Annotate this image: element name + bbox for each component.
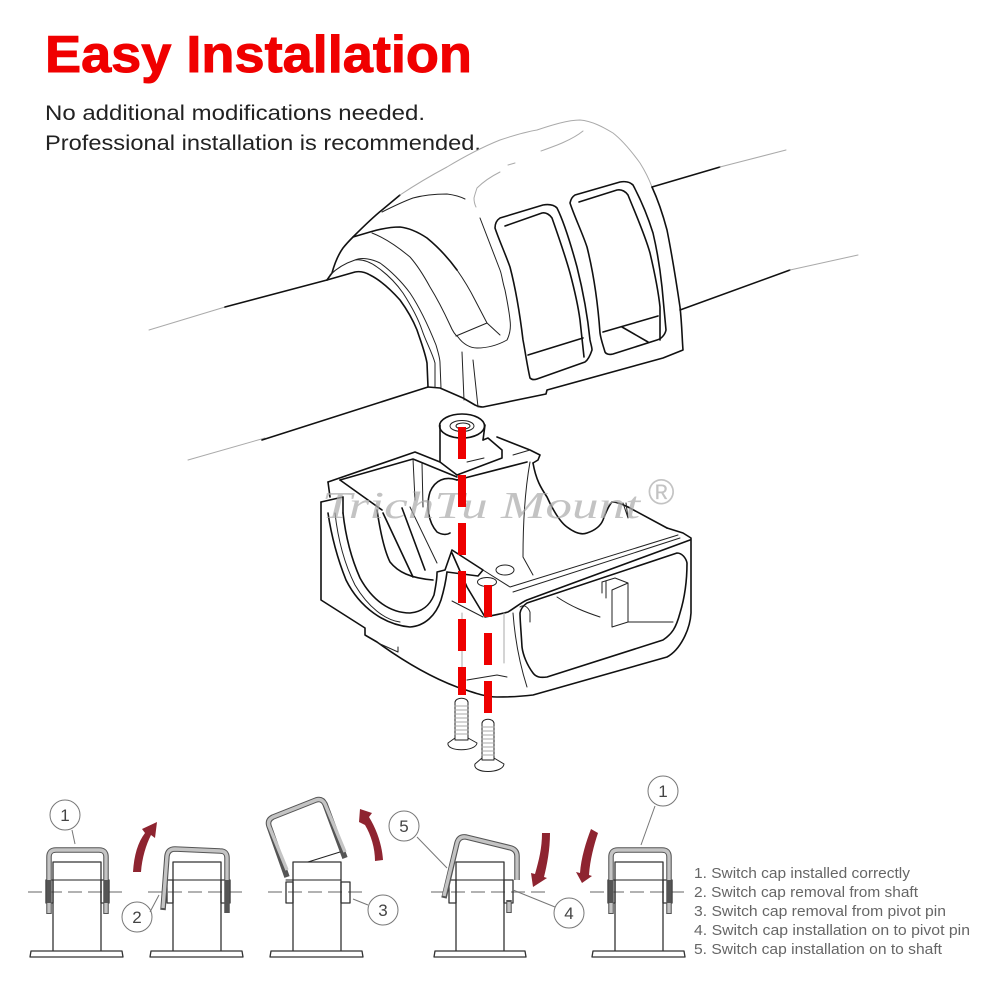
legend: 3. Switch cap removal from pivot pin xyxy=(694,903,946,920)
screws xyxy=(448,698,504,772)
arrow down 1 xyxy=(531,833,550,887)
housing switch window xyxy=(513,553,687,687)
step diagram 2: 2 xyxy=(132,908,142,927)
arrow up 2 xyxy=(359,809,383,861)
left switch opening xyxy=(495,205,592,380)
subtitle text: No additional modifications needed. xyxy=(45,102,425,125)
arrow down 2 xyxy=(576,829,598,883)
step diagram 1 xyxy=(28,800,123,957)
screw left xyxy=(448,698,477,750)
subtitle text: Professional installation is recommended. xyxy=(45,132,481,155)
watermark: TrichTu Mount xyxy=(322,485,642,527)
pivot post xyxy=(440,414,540,475)
oval hole xyxy=(428,478,457,534)
clamp channel xyxy=(328,507,447,627)
step diagram 5: 1 xyxy=(658,782,668,801)
legend: 2. Switch cap removal from shaft xyxy=(694,884,919,901)
arrow up 1 xyxy=(133,822,157,872)
title: Easy Installation xyxy=(45,26,472,84)
legend: 5. Switch cap installation on to shaft xyxy=(694,941,943,958)
retaining clip xyxy=(557,578,673,627)
legend: 1. Switch cap installed correctly xyxy=(694,865,911,882)
rear arch xyxy=(457,462,667,575)
step diagram 4: 4 xyxy=(564,904,574,923)
legend xyxy=(694,865,970,958)
handlebar tube xyxy=(149,150,858,460)
watermark: ® xyxy=(648,471,675,512)
housing outer outline xyxy=(321,452,691,697)
step diagram 3 xyxy=(268,800,398,957)
right switch opening xyxy=(570,182,666,354)
screw right xyxy=(475,719,504,772)
step diagram 1: 1 xyxy=(60,806,70,825)
watermark xyxy=(322,471,675,527)
legend: 4. Switch cap installation on to pivot pin xyxy=(694,922,970,939)
step diagram 3: 3 xyxy=(378,901,388,920)
red dashed guide lines xyxy=(458,427,492,713)
switch cap outline xyxy=(327,120,683,407)
central saddle xyxy=(437,535,690,617)
step diagram 4: 5 xyxy=(399,817,409,836)
step diagram 5 xyxy=(590,776,685,957)
handlebar with switch cap xyxy=(149,120,858,460)
switch housing xyxy=(321,414,691,697)
housing lower details xyxy=(378,601,507,680)
subtitle text xyxy=(45,102,481,155)
step diagram 2 xyxy=(122,849,243,957)
step diagram 4 xyxy=(389,811,584,957)
